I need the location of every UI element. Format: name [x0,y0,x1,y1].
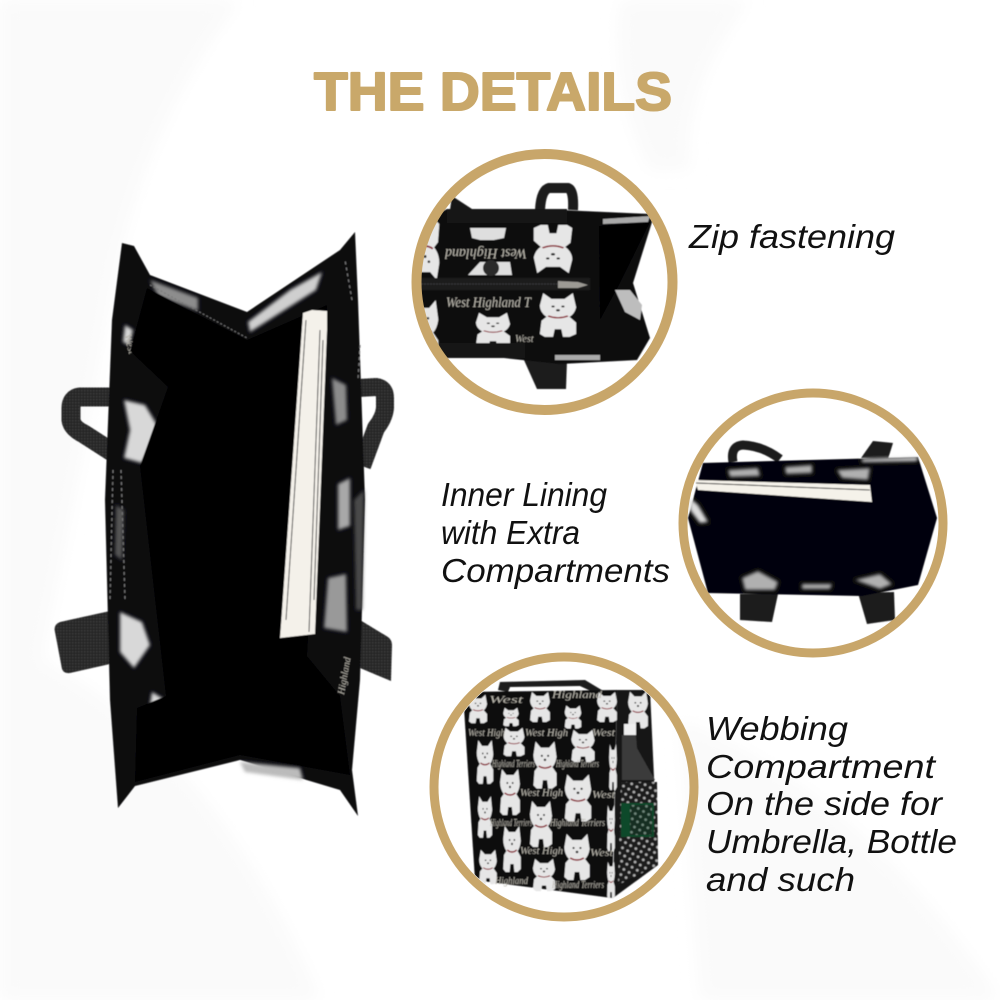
label: webbing compartment: Compartment [706,748,937,785]
zipper [410,278,590,290]
zip photo [410,188,652,389]
printed dogs [469,692,648,898]
script on fabric: Highland Terriers [489,817,532,829]
side panel [613,690,658,898]
bag handles [540,188,573,210]
label: inner lining: with Extra [441,514,580,551]
tote front photo [463,680,658,898]
lower band [440,343,525,358]
script on fabric [468,689,616,891]
lining stitching [150,285,247,338]
label: inner lining [441,476,670,589]
script on fabric: West High [525,727,568,739]
label: inner lining: Inner Lining [441,476,608,513]
handle: left upper [71,397,112,452]
gold ring [434,657,694,917]
white inner pocket [280,310,327,638]
main bag photo: open tote seen from above [55,232,392,816]
printed dogs [534,225,572,273]
detail circle: webbing compartment [434,657,694,917]
label: webbing compartment: and such [706,861,855,898]
script on fabric: West [489,694,525,706]
handle: right lower [360,620,392,681]
script on fabric: Highland Terriers [549,817,605,829]
book / pocket [695,480,872,502]
title: THE DETAILS [314,62,672,122]
label: zip fastening: Zip fastening [688,218,896,255]
gold ring [416,154,672,410]
fabric patches [690,457,918,590]
script pattern on rim: West [121,333,138,356]
zip photo: West Highland T [446,295,532,311]
script pattern on rim: Highland [336,655,354,697]
lining side [599,222,650,320]
bag top [410,209,652,364]
lining photo [688,441,937,624]
green bottle label [621,803,654,837]
top band [447,209,567,223]
handle: right upper [358,387,385,466]
inner lining [130,288,350,782]
script on fabric: West Highland [445,245,527,261]
script on fabric: West High [520,845,563,857]
front panel [463,690,617,898]
script on fabric: Highland Terriers [551,879,604,891]
label: webbing compartment: On the side for [706,785,944,822]
script on fabric: Highland Terriers [491,758,535,770]
label: webbing compartment [706,710,957,898]
handle: left lower [55,611,110,673]
mesh pocket [618,782,658,885]
zip photo: West [515,334,534,345]
script on fabric: West [592,727,616,739]
handles [498,680,605,693]
script on fabric: West [590,847,614,859]
label: webbing compartment: Webbing [706,710,849,747]
script on fabric: Highland [551,689,603,701]
script pattern on rim [110,260,360,778]
printed fabric rim: dogs and script [115,272,364,780]
handles [732,445,780,462]
script on fabric: West High [520,787,563,799]
detail circle: inner lining [683,393,943,653]
script on fabric: Highland Terriers [555,758,599,770]
zipper pull [558,281,588,288]
label: webbing compartment: Umbrella, Bottle [706,823,957,860]
script on fabric: Highland [494,875,528,887]
water bottle [622,735,655,780]
bag body [688,457,937,596]
gold ring [683,393,943,653]
script on fabric: West [592,789,616,801]
script on fabric: West High [468,727,505,739]
bag body outline [105,232,365,816]
label: inner lining: Compartments [441,552,670,589]
script pattern on rim: Highland Terriers [137,752,211,778]
dog fragments [468,216,650,360]
detail circle: zip fastening [410,154,672,410]
